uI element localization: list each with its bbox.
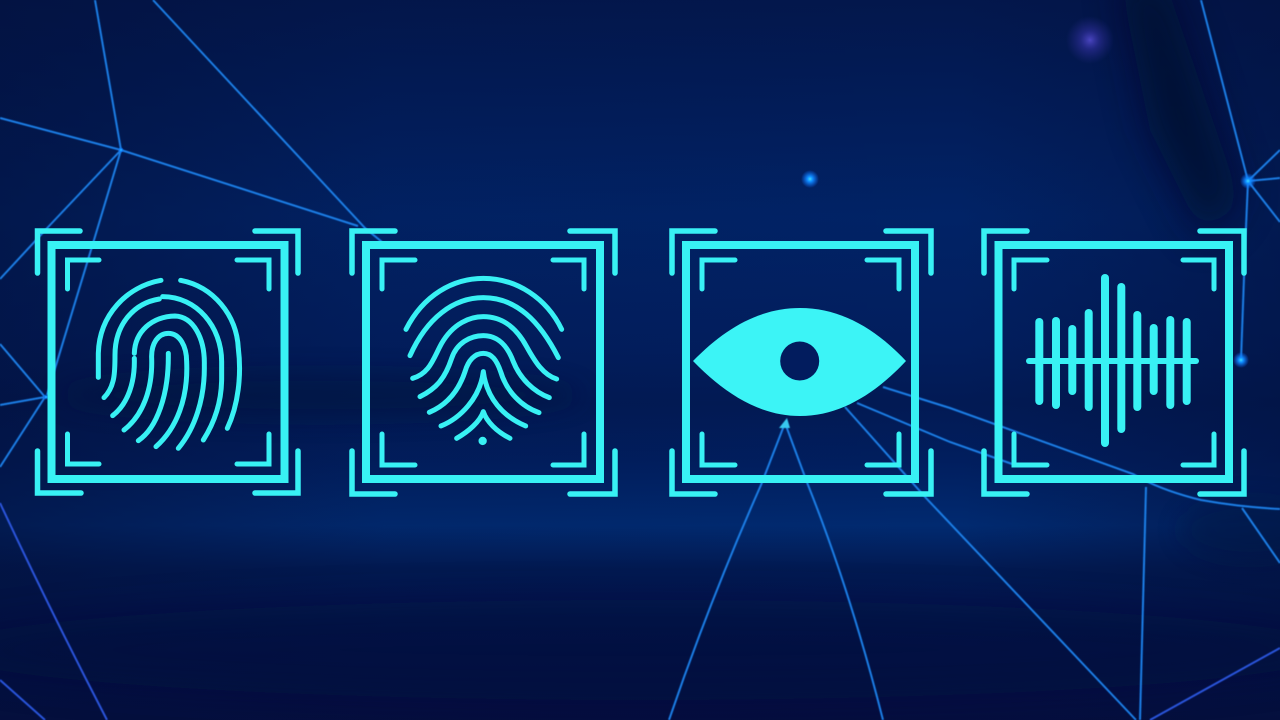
- icon: loop fingerprint: [98, 280, 240, 448]
- glowing nodes: [43, 16, 1256, 400]
- panel: eye: [672, 231, 931, 494]
- panel: fingerprint oval: [38, 231, 298, 493]
- panel: voice: [984, 231, 1244, 494]
- icon: arch fingerprint: [406, 278, 562, 443]
- frame: fingerprint arch: [352, 231, 615, 494]
- frame: eye: [672, 231, 931, 494]
- panel: fingerprint arch: [352, 231, 615, 494]
- frame: fingerprint oval: [38, 231, 298, 493]
- icon: eye: [693, 308, 906, 416]
- icon: voice waveform: [1029, 278, 1196, 443]
- frame: voice: [984, 231, 1244, 494]
